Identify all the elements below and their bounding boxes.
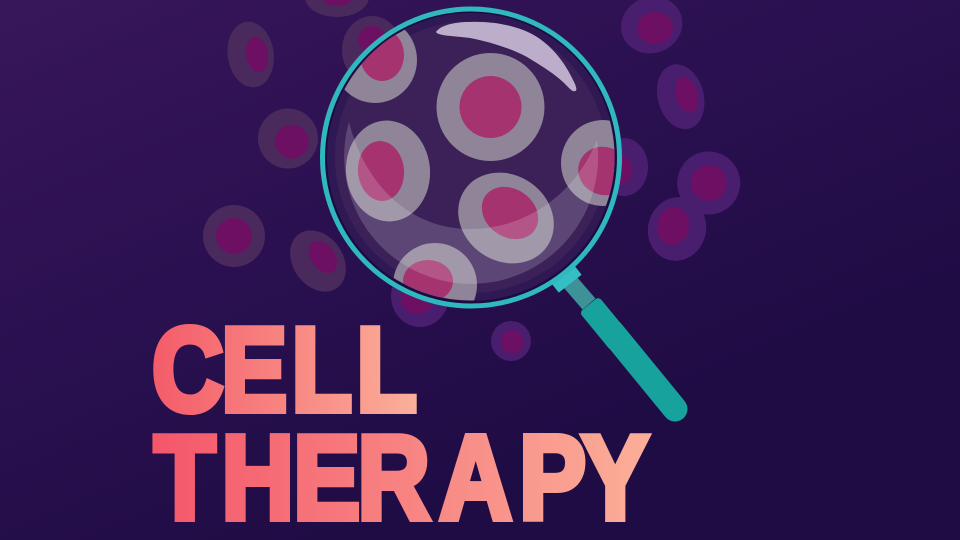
background cells xyxy=(203,0,740,361)
magnified cells xyxy=(344,30,614,300)
title xyxy=(152,304,649,540)
lens base xyxy=(324,10,618,304)
handle collar xyxy=(551,265,582,293)
magnifying glass handle xyxy=(551,265,675,409)
title line: CELL: CELL xyxy=(152,304,417,437)
lens ring xyxy=(322,9,620,306)
handle grip xyxy=(579,297,675,409)
magnifying glass lens xyxy=(320,6,622,308)
lower glass reflection xyxy=(344,122,598,284)
handle neck xyxy=(570,282,589,304)
upper glass highlight xyxy=(436,22,576,91)
